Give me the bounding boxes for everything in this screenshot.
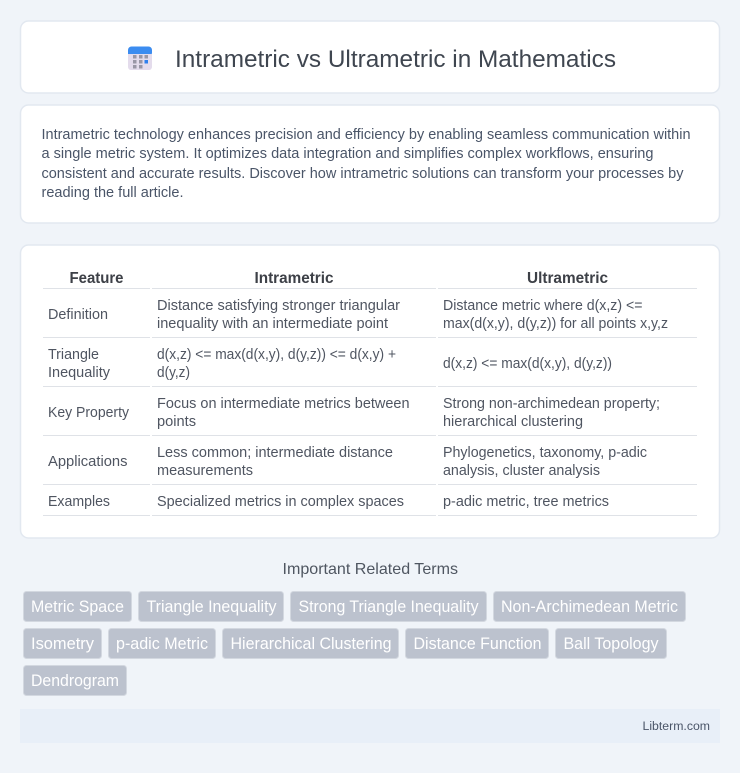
row: key property: hierarchical clustering: [443, 414, 583, 430]
row: key property: [48, 396, 660, 430]
row: key property: Focus on intermediate metrics between: [157, 396, 410, 412]
tag: Dendrogram: Dendrogram: [31, 672, 119, 690]
row: examples: Examples: [48, 494, 110, 510]
table header: Ultrametric: [527, 270, 608, 287]
row: examples: p-adic metric, tree metrics: [443, 494, 609, 510]
intro text: consistent and accurate results. Discover how intrametric solutions can transform your processes by: [42, 166, 684, 182]
row: definition: inequality with an intermediate point: [157, 316, 388, 332]
tag: Triangle Inequality: Triangle Inequality: [146, 598, 277, 616]
tag: Non-Archimedean Metric: Non-Archimedean Metric: [501, 598, 678, 616]
row: examples: Specialized metrics in complex spaces: [157, 494, 404, 510]
tag: Hierarchical Clustering: Hierarchical Clustering: [230, 635, 392, 653]
icon: calendar: [128, 46, 152, 70]
row: key property: Key Property: [48, 405, 130, 421]
tag: p-adic Metric: p-adic Metric: [116, 635, 208, 653]
tag: Distance Function: Distance Function: [414, 635, 542, 653]
title: Intrametric vs Ultrametric in Mathematics: [175, 46, 616, 73]
row: applications: [48, 445, 647, 479]
row: definition: Distance metric where d(x,z) <=: [443, 298, 642, 314]
tag: Isometry: Isometry: [31, 635, 95, 653]
row: applications: Phylogenetics, taxonomy, p-adic: [443, 445, 647, 461]
panel: comparison table: [20, 245, 720, 538]
intro text: Intrametric technology enhances precision and efficiency by enabling seamless communication within: [42, 127, 690, 143]
tag: Strong Triangle Inequality: Strong Triangle Inequality: [298, 598, 479, 616]
row: definition: Distance satisfying stronger triangular: [157, 298, 400, 314]
tag: p-adic Metric: [108, 628, 216, 658]
panel: header: [20, 21, 720, 93]
tag: Ball Topology: [556, 628, 666, 658]
tag: Strong Triangle Inequality: [290, 592, 486, 622]
row: definition: [48, 298, 668, 332]
tag: Metric Space: [24, 592, 132, 622]
tag: Metric Space: Metric Space: [31, 598, 124, 616]
row: applications: analysis, cluster analysis: [443, 463, 600, 479]
table header: Intrametric: [254, 270, 334, 287]
tag: Ball Topology: Ball Topology: [564, 635, 659, 653]
row: triangle inequality: d(x,z) <= max(d(x,y), d(y,z)): [443, 356, 612, 372]
footer: Libterm.com: [642, 719, 710, 733]
tag: Triangle Inequality: [138, 592, 284, 622]
row: triangle inequality: Triangle: [48, 347, 99, 363]
table header: Feature: [70, 270, 124, 287]
row: definition: Definition: [48, 307, 108, 323]
row: triangle inequality: [48, 347, 612, 381]
row: applications: Applications: [48, 454, 128, 470]
tag: Dendrogram: [24, 666, 126, 696]
row: key property: points: [157, 414, 196, 430]
table header: [70, 270, 608, 287]
tag: Distance Function: [406, 628, 548, 658]
row: applications: Less common; intermediate distance: [157, 445, 393, 461]
intro text: [42, 127, 690, 201]
panel: introduction: [20, 105, 720, 223]
related term tags: [24, 592, 686, 696]
tag: Non-Archimedean Metric: [494, 592, 686, 622]
heading: related terms: Important Related Terms: [282, 561, 458, 578]
intro text: a single metric system. It optimizes data integration and simplifies complex workflows, ensuring: [42, 146, 654, 162]
row: key property: Strong non-archimedean property;: [443, 396, 660, 412]
row: applications: measurements: [157, 463, 253, 479]
row: triangle inequality: d(x,z) <= max(d(x,y), d(y,z)) <= d(x,y) +: [157, 347, 396, 363]
intro text: reading the full article.: [42, 185, 184, 201]
tag: Hierarchical Clustering: [222, 628, 398, 658]
row: definition: max(d(x,y), d(y,z)) for all points x,y,z: [443, 316, 668, 332]
tag: Isometry: [24, 628, 102, 658]
row: examples: [48, 494, 609, 510]
row: triangle inequality: d(y,z): [157, 365, 190, 381]
row: triangle inequality: Inequality: [48, 365, 111, 381]
footer: [20, 709, 720, 743]
